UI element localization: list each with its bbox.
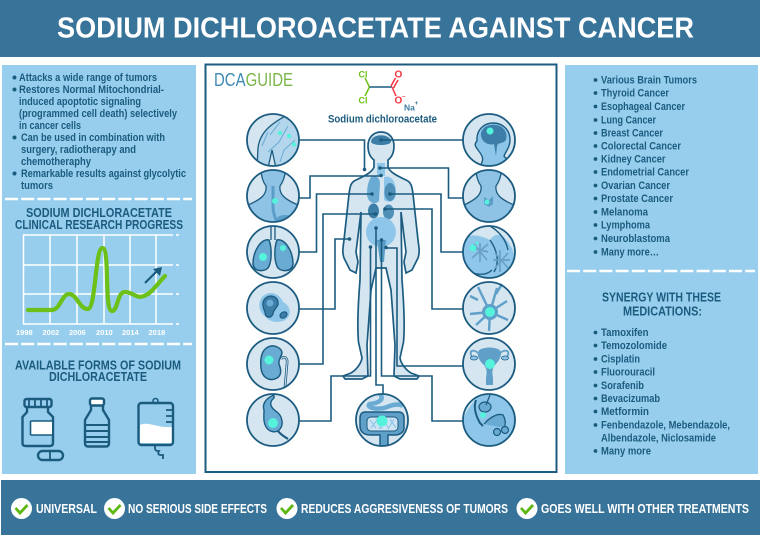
panel: left column — [2, 65, 196, 474]
heading: research progress: CLINICAL RESEARCH PROGRESS — [15, 217, 183, 232]
heading: synergy: SYNERGY WITH THESE — [602, 290, 721, 304]
icon: uterus — [463, 338, 515, 390]
molecule diagram — [358, 70, 418, 112]
check: side effects: NO SERIOUS SIDE EFFECTS — [128, 502, 267, 516]
icon: bottle — [85, 398, 109, 446]
icon: esophagus — [247, 168, 299, 226]
list: cancer types: Esophageal Cancer — [601, 101, 685, 113]
list: cancer types: Melanoma — [601, 206, 649, 218]
line chart: research progress: 2010 — [96, 328, 113, 337]
heading: synergy: MEDICATIONS: — [623, 304, 702, 318]
list: cancer types: Lymphoma — [601, 220, 651, 232]
icon: neuron — [463, 282, 515, 334]
text block: key benefits: Remarkable results against glycolytic — [21, 168, 186, 180]
heading: research progress — [15, 205, 183, 232]
icon: prostate — [462, 393, 516, 447]
list: medications: Cisplatin — [601, 354, 640, 366]
molecule name: Sodium dichloroacetate — [328, 114, 437, 126]
line chart: research progress: 2006 — [69, 328, 86, 337]
list: cancer types: Many more… — [601, 246, 659, 258]
line chart: research progress: 1998 — [16, 328, 33, 337]
check: side effects — [104, 498, 267, 519]
line chart: research progress: 2018 — [148, 328, 165, 337]
header banner — [0, 0, 760, 57]
icon: pill jar — [22, 399, 63, 460]
icon: IV drip bag — [138, 398, 173, 459]
list: cancer types: Prostate Cancer — [601, 193, 673, 205]
panel: central diagram — [206, 64, 556, 472]
arrow: upward trend — [145, 267, 162, 283]
text block: key benefits: in cancer cells — [19, 120, 81, 132]
text block: key benefits: induced apoptotic signaling — [19, 96, 141, 108]
icon: breast — [463, 226, 515, 280]
text block: key benefits: chemotheraphy — [21, 156, 92, 168]
list: medications: Tamoxifen — [601, 327, 649, 339]
icon: kidney — [247, 338, 299, 390]
heading: available forms — [15, 358, 181, 384]
footer banner — [1, 480, 760, 535]
heading: research progress: SODIUM DICHLORACETATE — [26, 205, 172, 220]
molecule diagram: Na — [404, 102, 415, 112]
human body figure — [343, 132, 419, 379]
molecule diagram: O — [394, 96, 402, 106]
icon: lymphatic shoulder — [247, 114, 300, 168]
text block: key benefits: tumors — [21, 180, 53, 192]
icon: thyroid — [463, 168, 515, 226]
list: medications: Bevacizumab — [601, 393, 660, 405]
list: medications: Sorafenib — [601, 380, 644, 392]
list: cancer types: Breast Cancer — [601, 128, 663, 140]
heading: available forms: DICHLORACETATE — [49, 369, 147, 384]
line chart: research progress: 2002 — [42, 328, 59, 337]
list: cancer types: Kidney Cancer — [601, 154, 666, 166]
list: cancer types: Colorectal Cancer — [601, 140, 681, 152]
list: cancer types: Ovarian Cancer — [601, 180, 670, 192]
list: medications: Temozolomide — [601, 340, 667, 352]
icon: colon — [356, 394, 408, 446]
text block: key benefits: surgery, radiotherapy and — [21, 144, 136, 156]
molecule diagram: O — [394, 70, 402, 80]
list: medications: Metformin — [601, 406, 649, 418]
check: aggressiveness — [276, 498, 508, 519]
check: other treatments — [516, 498, 749, 519]
list: medications: Fenbendazole, Mebendazole, — [601, 420, 730, 432]
connector lines — [298, 138, 463, 421]
icon: brain in head — [463, 114, 518, 170]
list: cancer types — [594, 74, 697, 258]
line chart: research progress: 2014 — [122, 328, 140, 337]
check: universal — [11, 498, 97, 519]
list: medications: Many more — [601, 446, 651, 458]
list: cancer types: Neuroblastoma — [601, 233, 671, 245]
text block: key benefits: Restores Normal Mitochondrial- — [19, 84, 164, 96]
line chart: research progress — [16, 235, 179, 337]
logo: DCAGUIDE — [214, 69, 293, 90]
panel: right column — [565, 65, 758, 474]
molecule diagram: + — [414, 100, 418, 107]
check: aggressiveness: REDUCES AGGRESIVENESS OF TUMORS — [301, 502, 508, 516]
list: medications: Albendazole, Niclosamide — [601, 432, 716, 444]
text block: key benefits: Attacks a wide range of tumors — [19, 72, 157, 84]
text block: key benefits: (programmed cell death) selectively — [19, 108, 178, 120]
list: medications: Fluorouracil — [601, 366, 655, 378]
list: cancer types: Various Brain Tumors — [601, 74, 697, 86]
check: universal: UNIVERSAL — [36, 502, 97, 516]
list: cancer types: Lung Cancer — [601, 114, 656, 126]
list: cancer types: Thyroid Cancer — [601, 88, 669, 100]
list: cancer types: Endometrial Cancer — [601, 166, 689, 178]
molecule diagram: Cl — [358, 96, 368, 106]
molecule diagram: Cl — [358, 70, 368, 80]
text block: key benefits: Can be used in combination with — [21, 132, 165, 144]
organs — [366, 135, 396, 262]
title: SODIUM DICHLOROACETATE AGAINST CANCER — [57, 12, 694, 44]
heading: synergy — [602, 290, 721, 318]
text block: key benefits — [12, 72, 186, 192]
heading: available forms: AVAILABLE FORMS OF SODIUM — [15, 358, 181, 372]
icon: lungs — [247, 226, 299, 278]
icon: melanoma — [247, 282, 299, 334]
icon: stomach — [247, 394, 299, 446]
molecule diagram: – — [402, 94, 406, 100]
list: medications — [594, 327, 730, 458]
